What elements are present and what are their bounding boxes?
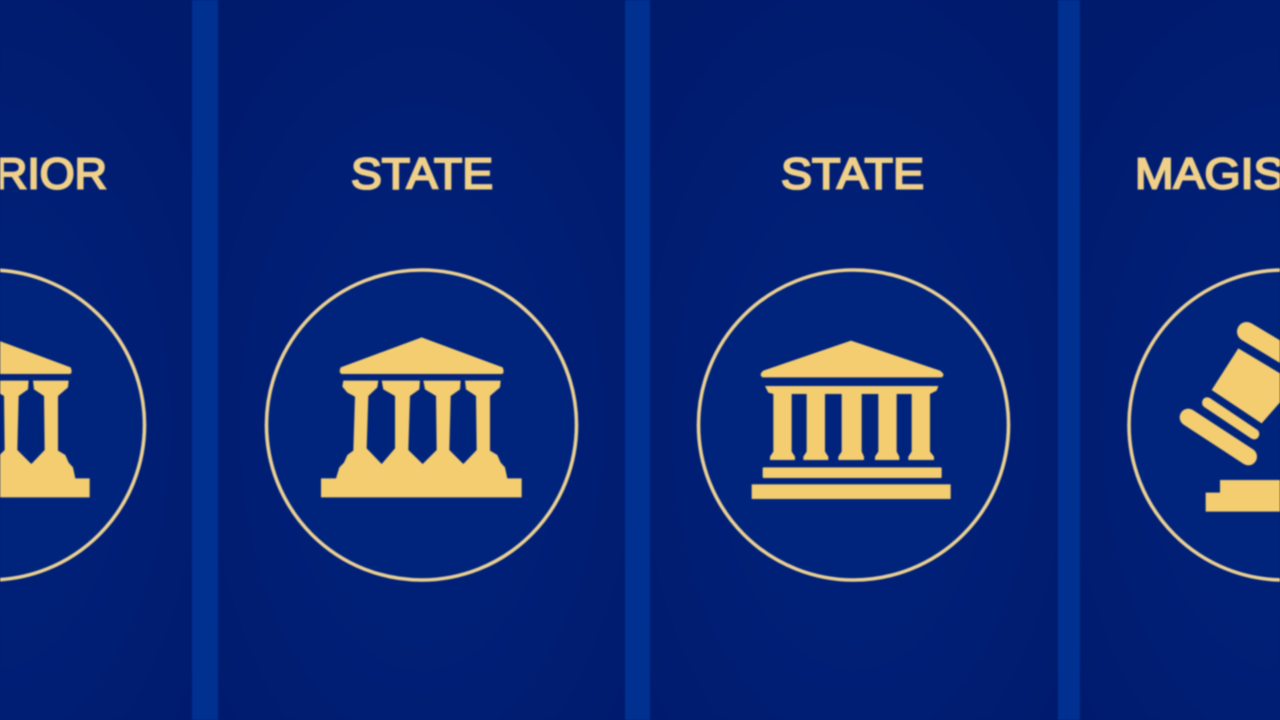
heading: state: STATE xyxy=(351,150,493,198)
icon: gavel in circle xyxy=(1129,270,1280,580)
icon: classical building in circle xyxy=(698,270,1008,580)
divider stripe xyxy=(1058,0,1080,720)
heading: state: STATE xyxy=(781,150,924,198)
divider stripe xyxy=(192,0,218,720)
panel: superior court xyxy=(0,0,192,720)
panel: state court 2 xyxy=(650,0,1058,720)
icon: columned building in circle xyxy=(0,270,144,580)
divider stripe xyxy=(625,0,650,720)
icon: columned building in circle xyxy=(266,270,576,580)
panel: magistrate court xyxy=(1080,0,1280,720)
panel: state court xyxy=(218,0,625,720)
